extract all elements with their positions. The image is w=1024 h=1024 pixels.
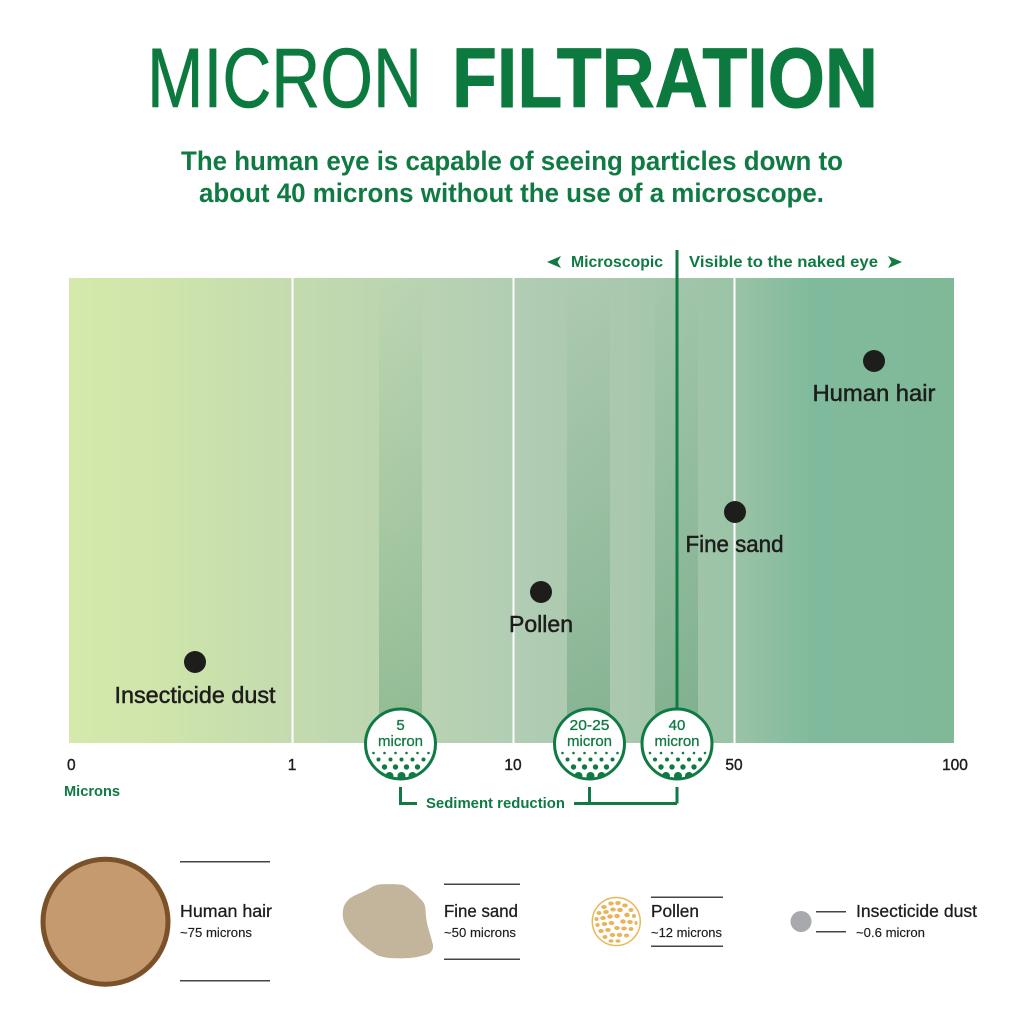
arrow: microscopic left (547, 256, 561, 268)
legend: Pollen: Pollen (651, 901, 699, 921)
title: FILTRATION (452, 31, 878, 125)
legend: Fine sand: ~50 microns (444, 925, 517, 940)
legend: Human hair: Human hair (180, 901, 272, 921)
marker: Fine sand (686, 501, 784, 557)
legend: Fine sand: Fine sand (444, 901, 518, 921)
marker: Human hair (812, 350, 936, 406)
legend: Insecticide dust (790, 901, 977, 940)
subtitle (181, 146, 843, 208)
axis labels: 0 (67, 757, 76, 774)
title: MICRON (147, 31, 422, 125)
legend: Human hair (43, 859, 272, 984)
filter badge: 5 micron: micron (378, 733, 423, 750)
marker: Pollen: Pollen (509, 611, 573, 637)
legend: Insecticide dust: ~0.6 micron (856, 925, 925, 940)
label: Visible to the naked eye: Visible to the naked eye (689, 254, 878, 271)
subtitle: The human eye is capable of seeing particles down to (181, 146, 843, 176)
legend: Pollen: ~12 microns (651, 925, 722, 940)
filter badge: 5 micron: 5 (396, 717, 405, 734)
filter band: 5 micron (379, 278, 422, 743)
filter badge: 20-25 micron (554, 709, 624, 780)
bracket: sediment reduction: Sediment reduction (426, 795, 565, 812)
filter badge: 40 micron (642, 709, 712, 780)
marker: Insecticide dust: Insecticide dust (114, 682, 276, 708)
bracket: sediment reduction (400, 787, 677, 812)
filter band: 20-25 micron (567, 278, 610, 743)
axis labels: 1 (288, 757, 296, 774)
axis labels: 50 (725, 757, 743, 774)
chart: micron scale (64, 278, 968, 800)
axis labels (67, 757, 968, 774)
label: Microscopic: Microscopic (571, 254, 663, 271)
arrow: visible right (888, 256, 902, 268)
legend: Insecticide dust: Insecticide dust (856, 901, 977, 921)
filter badge: 40 micron: micron (654, 733, 700, 750)
subtitle: about 40 microns without the use of a microscope. (199, 178, 824, 208)
marker: Fine sand: Fine sand (686, 531, 784, 557)
marker: Pollen (509, 581, 573, 637)
chart background gradient (69, 278, 954, 743)
axis labels: 10 (504, 757, 522, 774)
legend: Fine sand (343, 884, 520, 960)
icon: hair cross-section (43, 859, 168, 984)
filter band: 40 micron (655, 278, 698, 743)
icon: pollen grain (592, 898, 640, 946)
legend: Human hair: ~75 microns (180, 925, 253, 940)
threshold: microscopic vs visible (547, 250, 902, 710)
axis labels: 100 (942, 757, 968, 774)
icon: sand grain (343, 884, 433, 958)
filter badge: 20-25 micron: micron (567, 733, 612, 750)
title (147, 31, 878, 125)
filter badge: 20-25 micron: 20-25 (570, 717, 610, 734)
icon: dust particle (790, 911, 812, 932)
filter badge: 5 micron (366, 709, 436, 780)
filter badge: 40 micron: 40 (669, 717, 685, 734)
threshold line at 40 microns (676, 250, 678, 710)
marker: Human hair: Human hair (812, 380, 936, 406)
legend: Pollen (592, 896, 723, 947)
axis title: Microns (64, 784, 120, 800)
marker: Insecticide dust (114, 651, 276, 708)
